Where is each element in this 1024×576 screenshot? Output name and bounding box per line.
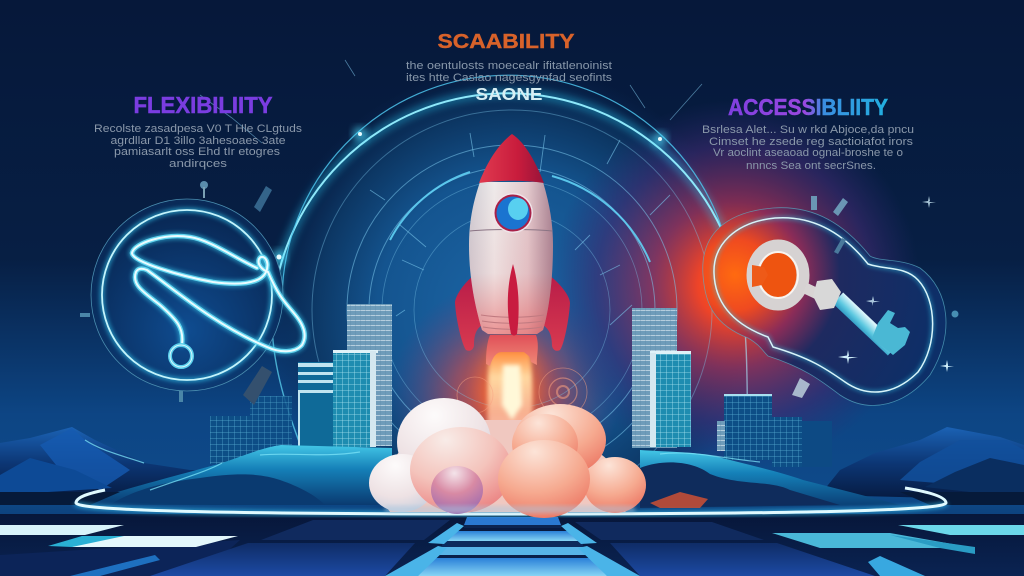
heading: flexibility: FLEXIBILIITY: [134, 92, 272, 118]
text block: flexibility: pamiasarlt oss Ehd tIr etogres: [114, 146, 281, 158]
floor panels: white left: [0, 525, 124, 535]
rocket body: [469, 182, 553, 334]
horizon ring: [76, 488, 946, 514]
icon: sparkles: [838, 196, 958, 372]
exhaust cloud: [369, 398, 646, 518]
text block: flexibility: andirqces: [169, 158, 228, 170]
text block: scalability: [406, 60, 613, 84]
rocket centre fin: [508, 264, 519, 336]
background gear glow: [457, 368, 587, 416]
text block: accessibility: nnncs Sea ont secrSnes.: [746, 160, 876, 172]
text block: scalability: the oentulosts moecealr ifitatlenoinist: [406, 60, 612, 72]
rocket nozzle: [486, 335, 538, 366]
icon: connector fittings: [80, 181, 272, 405]
text block: accessibility: Cimset he zsede reg sactioiafot irors: [709, 136, 914, 148]
text block: accessibility: [702, 124, 914, 172]
label: saone: SAONE: [476, 84, 542, 104]
central steps: [385, 517, 640, 576]
rocket porthole: [493, 193, 533, 233]
panel: flexibility icon: [80, 181, 305, 405]
rocket: [455, 134, 570, 366]
icon: flexible rope: [132, 236, 305, 367]
floor panels: cyan right: [898, 525, 1024, 535]
city skyline: left: [210, 304, 392, 464]
rocket nose cone: [479, 134, 544, 183]
heading: scalability: SCAABILITY: [438, 30, 575, 53]
radar rings: [312, 110, 712, 510]
icon: key: [752, 246, 910, 355]
city skyline: right: [632, 308, 832, 467]
text block: flexibility: [94, 123, 303, 170]
floor: [0, 514, 1024, 576]
icon: connector fittings: [792, 196, 848, 398]
text block: flexibility: agrdllar D1 3illo 3ahesoaes 3ate: [110, 135, 286, 147]
text block: accessibility: Bsrlesa Alet... Su w rkd Abjoce,da pncu: [702, 124, 914, 136]
arc light nodes: [266, 127, 667, 295]
rocket fins: [455, 275, 570, 351]
text block: scalability: ites htte Caslao nagesgynfad seofints: [406, 72, 613, 84]
panel: accessibility icon: [703, 196, 958, 405]
outer glowing arc: [200, 60, 750, 470]
text block: flexibility: Recolste zasadpesa V0 T Hle CLgtuds: [94, 123, 303, 135]
heading: accessibility: ACCESSIBLIITY: [728, 94, 888, 120]
mountains: [0, 427, 1024, 508]
text block: accessibility: Vr aoclint aseaoad ognal-broshe te o: [713, 147, 903, 159]
rocket exhaust flame: [478, 335, 542, 440]
